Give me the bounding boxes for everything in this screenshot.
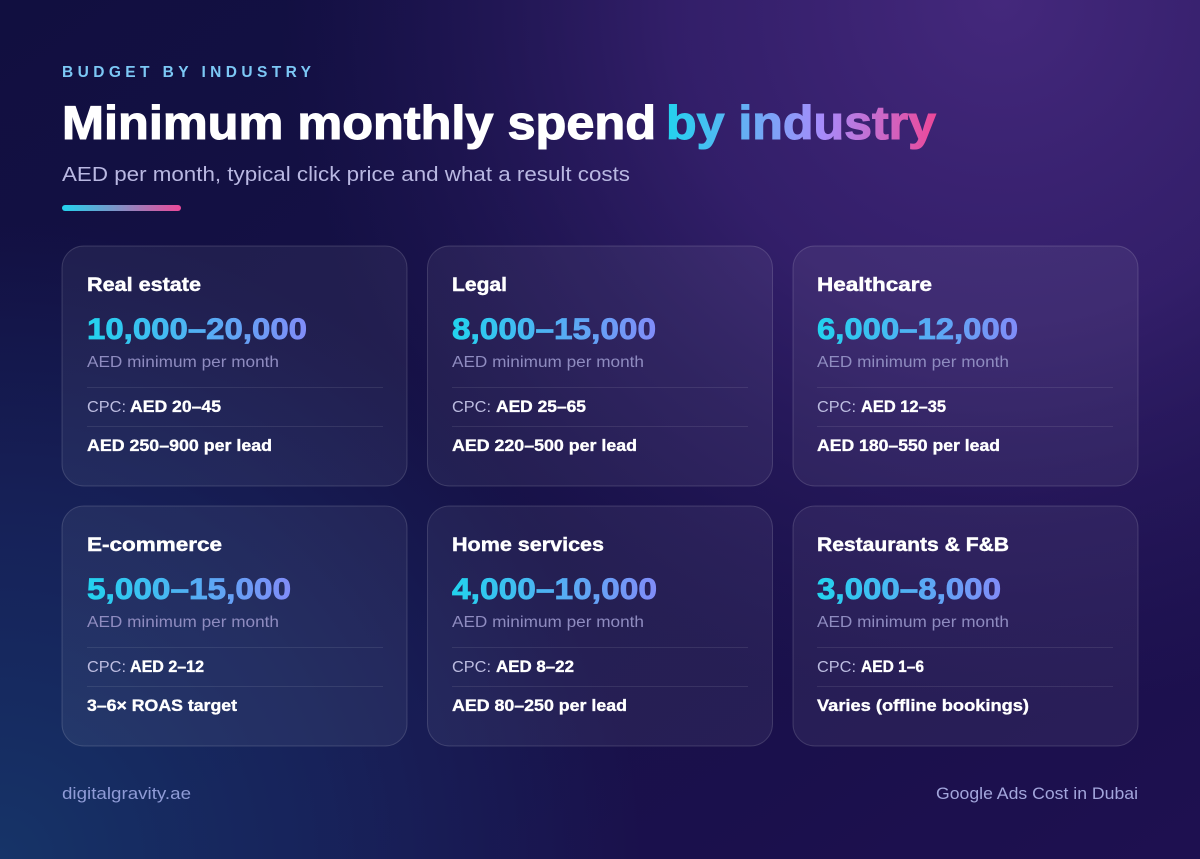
- real estate CPC: CPC:: [87, 399, 126, 416]
- home services CPC: AED 8–22: [496, 658, 574, 676]
- home services CPC: [452, 658, 574, 676]
- legal CPC: [452, 398, 586, 416]
- legal CPC: CPC:: [452, 399, 491, 416]
- restaurants CPC: AED 1–6: [861, 658, 924, 676]
- home services heading: Home services: [452, 534, 604, 556]
- restaurants CPC: [817, 658, 924, 676]
- healthcare CPC: [817, 398, 946, 416]
- e-commerce budget label: AED minimum per month: [87, 614, 279, 631]
- legal heading: Legal: [452, 274, 507, 296]
- healthcare CPC: AED 12–35: [861, 398, 946, 416]
- home services budget label: AED minimum per month: [452, 614, 644, 631]
- healthcare result cost: AED 180–550 per lead: [817, 437, 1000, 455]
- home services budget: 4,000–10,000: [452, 573, 657, 606]
- legal result cost: AED 220–500 per lead: [452, 437, 637, 455]
- real estate result cost: AED 250–900 per lead: [87, 437, 272, 455]
- legal CPC: AED 25–65: [496, 398, 586, 416]
- panel: real estate: [62, 246, 407, 486]
- real estate heading: Real estate: [87, 274, 201, 296]
- panel: restaurants and F&B: [793, 506, 1138, 746]
- restaurants budget label: AED minimum per month: [817, 614, 1009, 631]
- e-commerce CPC: CPC:: [87, 659, 126, 676]
- home services CPC: CPC:: [452, 659, 491, 676]
- e-commerce CPC: AED 2–12: [130, 658, 204, 676]
- e-commerce result target: 3–6× ROAS target: [87, 697, 238, 715]
- e-commerce budget: 5,000–15,000: [87, 573, 291, 606]
- e-commerce CPC: [87, 658, 204, 676]
- legal budget label: AED minimum per month: [452, 354, 644, 371]
- restaurants budget: 3,000–8,000: [817, 573, 1001, 606]
- panel: e-commerce: [62, 506, 407, 746]
- title: [62, 96, 936, 149]
- restaurants CPC: CPC:: [817, 659, 856, 676]
- footer: website: digitalgravity.ae: [62, 785, 191, 803]
- e-commerce heading: E-commerce: [87, 534, 222, 556]
- healthcare budget: 6,000–12,000: [817, 313, 1018, 346]
- restaurants result note: Varies (offline bookings): [817, 697, 1029, 715]
- healthcare CPC: CPC:: [817, 399, 856, 416]
- panel: healthcare: [793, 246, 1138, 486]
- legal budget: 8,000–15,000: [452, 313, 656, 346]
- panel: legal: [428, 246, 772, 486]
- panel: home services: [428, 506, 772, 746]
- footer: source article: Google Ads Cost in Dubai: [936, 785, 1138, 803]
- healthcare budget label: AED minimum per month: [817, 354, 1009, 371]
- title: Minimum monthly spend: [62, 96, 656, 149]
- home services result cost: AED 80–250 per lead: [452, 697, 627, 715]
- real estate budget: 10,000–20,000: [87, 313, 307, 346]
- subtitle: AED per month, typical click price and what a result costs: [62, 163, 630, 186]
- healthcare heading: Healthcare: [817, 274, 932, 296]
- title: by industry: [666, 96, 936, 149]
- eyebrow label: BUDGET BY INDUSTRY: [62, 64, 312, 81]
- real estate budget label: AED minimum per month: [87, 354, 279, 371]
- real estate CPC: [87, 398, 221, 416]
- real estate CPC: AED 20–45: [130, 398, 221, 416]
- restaurants heading: Restaurants & F&B: [817, 534, 1009, 556]
- accent bar: [62, 205, 181, 211]
